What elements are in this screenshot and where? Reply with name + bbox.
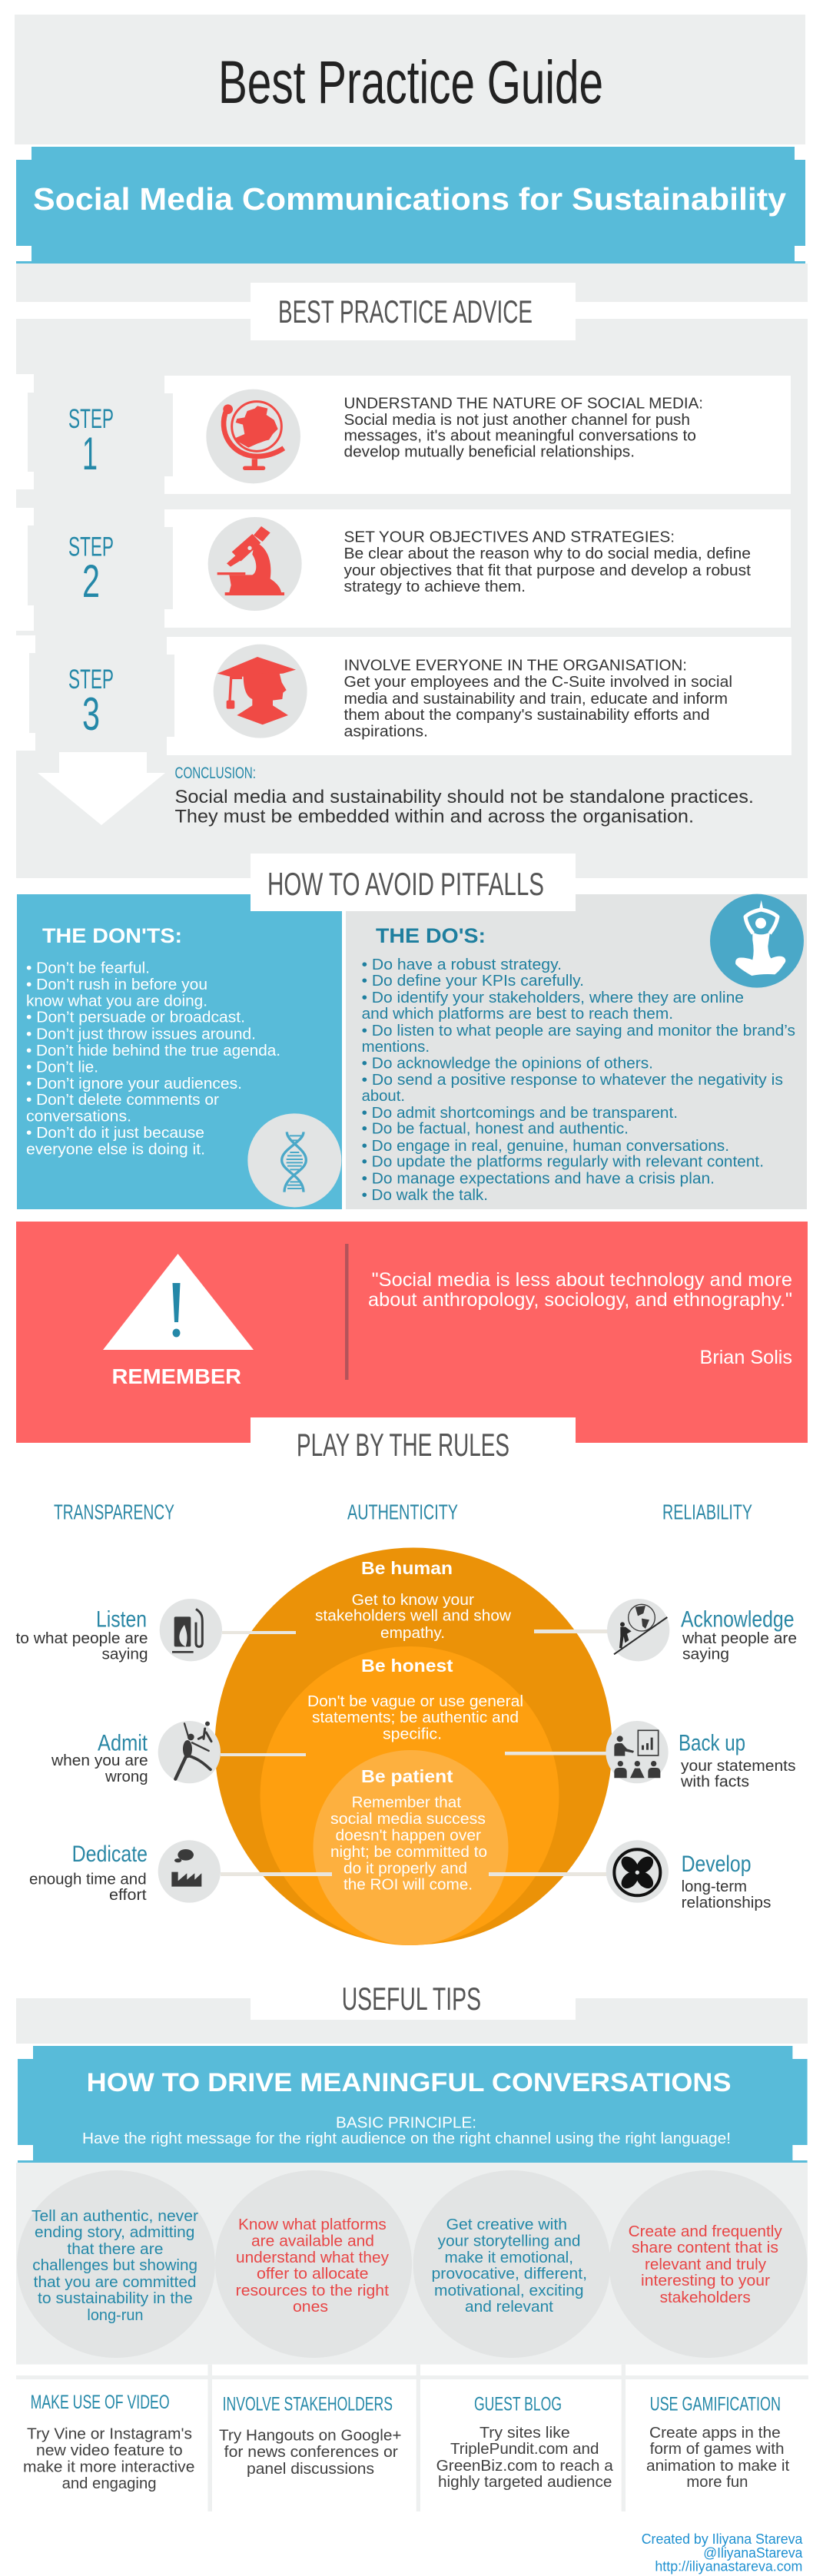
tip column: guest blog: TriplePundit.com and <box>450 2440 599 2458</box>
rule: listen <box>15 1599 222 1663</box>
icon: microscope <box>208 517 302 611</box>
don'ts list: know what you are doing. <box>26 993 207 1010</box>
do's list: • Do update the platforms regularly with relevant content. <box>362 1154 764 1171</box>
be patient <box>330 1766 487 1894</box>
do's list: • Do be factual, honest and authentic. <box>362 1121 629 1138</box>
rule: dedicate: enough time and <box>29 1871 147 1888</box>
tip circle 2 <box>215 2170 412 2358</box>
be honest: Be honest <box>361 1656 453 1676</box>
panel: do's <box>346 894 807 1209</box>
tip column: guest blog: GUEST BLOG <box>474 2394 562 2415</box>
tip circle 1 <box>17 2170 215 2358</box>
icon: dna <box>247 1113 341 1207</box>
step 3 text: aspirations. <box>344 723 428 741</box>
column headings <box>54 1500 752 1524</box>
step 3 text <box>344 656 732 741</box>
quote <box>368 1269 792 1368</box>
step 3 text: INVOLVE EVERYONE IN THE ORGANISATION: <box>344 656 687 675</box>
step 2 text: your objectives that fit that purpose and develop a robust <box>344 562 751 579</box>
tip circle 4: Create and frequently <box>629 2223 783 2240</box>
icon: yoga <box>710 894 804 988</box>
don'ts list: • Don’t persuade or broadcast. <box>26 1010 245 1026</box>
icon: graduate <box>214 645 307 738</box>
do's list: mentions. <box>362 1039 430 1056</box>
title: Best Practice Guide <box>218 48 603 116</box>
rule: back up: Back up <box>679 1731 745 1756</box>
tip circle 1: Tell an authentic, never <box>32 2207 198 2225</box>
rule: listen: saying <box>101 1646 148 1663</box>
rule: back up <box>606 1721 796 1791</box>
tip circle 2: ones <box>293 2298 328 2316</box>
credits <box>642 2531 803 2574</box>
tip circle 4: share content that is <box>632 2239 778 2256</box>
panel: remember <box>16 1222 808 1443</box>
conclusion: Social media and sustainability should not be standalone practices. <box>175 787 754 807</box>
tip circle 4: interesting to your <box>641 2272 770 2289</box>
step 1 <box>16 374 791 494</box>
rule: acknowledge <box>607 1599 797 1663</box>
step 3: 3 <box>82 688 100 740</box>
quote: about anthropology, sociology, and ethnography." <box>368 1289 792 1311</box>
step 3 text: them about the company's sustainability efforts and <box>344 706 710 724</box>
rule: listen: Listen <box>96 1607 147 1632</box>
column headings: TRANSPARENCY <box>54 1500 174 1524</box>
tip circle 2: understand what they <box>236 2249 390 2266</box>
credits: Created by Iliyana Stareva <box>642 2531 803 2547</box>
tip column: video: and engaging <box>62 2475 157 2492</box>
conclusion <box>175 764 754 827</box>
don'ts list: • Don’t lie. <box>26 1059 98 1076</box>
icon: warning triangle <box>103 1254 254 1350</box>
don'ts list: conversations. <box>26 1109 131 1126</box>
be honest: Don't be vague or use general <box>307 1693 523 1710</box>
rule: dedicate: effort <box>109 1887 147 1904</box>
tip column: guest blog: Try sites like <box>480 2424 570 2442</box>
tip circle 1: that you are committed <box>34 2273 197 2291</box>
tip circle 1: to sustainability in the <box>38 2289 193 2307</box>
heading box: how to avoid pitfalls: HOW TO AVOID PITFALLS <box>267 866 544 902</box>
don'ts list: • Don’t be fearful. <box>26 960 150 976</box>
banner: how to drive meaningful conversations: HOW TO DRIVE MEANINGFUL CONVERSATIONS <box>87 2068 731 2097</box>
tip column: guest blog: GreenBiz.com to reach a <box>436 2457 613 2475</box>
step 3 <box>16 635 791 755</box>
tip column: gamification: Create apps in the <box>649 2424 781 2442</box>
do's list: • Do send a positive response to whatever the negativity is <box>362 1072 783 1089</box>
step 3 text: Get your employees and the C-Suite involved in social <box>344 673 732 691</box>
do's list: and which platforms are best to reach them. <box>362 1006 673 1023</box>
do's list: • Do listen to what people are saying and monitor the brand’s <box>362 1023 795 1039</box>
panel: useful tips heading: USEFUL TIPS <box>342 1981 481 2017</box>
tip column: video: make it more interactive <box>23 2458 194 2476</box>
tip column: video: new video feature to <box>36 2442 183 2459</box>
step 1: 1 <box>82 428 98 479</box>
icon: fuel pump <box>160 1599 222 1661</box>
step 2: 2 <box>82 555 100 607</box>
do's list: • Do admit shortcomings and be transparent. <box>362 1105 678 1122</box>
rule: develop <box>606 1840 771 1911</box>
quote: "Social media is less about technology and more <box>372 1269 792 1291</box>
step 2 text: SET YOUR OBJECTIVES AND STRATEGIES: <box>344 529 675 546</box>
don'ts list <box>26 960 280 1159</box>
tip circle 1: ending story, admitting <box>35 2223 194 2241</box>
credits: http://iliyanastareva.com <box>655 2559 802 2574</box>
tip circle 3: motivational, exciting <box>434 2282 584 2299</box>
do's list: • Do acknowledge the opinions of others. <box>362 1056 653 1073</box>
do's list: • Do engage in real, genuine, human conversations. <box>362 1138 729 1155</box>
be patient: Remember that <box>352 1795 461 1812</box>
step 2 text: strategy to achieve them. <box>344 578 526 595</box>
icon: factory <box>158 1840 221 1903</box>
quote: Brian Solis <box>699 1347 792 1368</box>
step 2 <box>16 508 791 631</box>
tip column: stakeholders: for news conferences or <box>224 2443 398 2461</box>
heading box: how to avoid pitfalls <box>251 854 576 911</box>
tip column: gamification: animation to make it <box>646 2457 790 2475</box>
step 2 text <box>344 529 751 595</box>
be honest: statements; be authentic and <box>312 1709 519 1726</box>
do's list: • Do have a robust strategy. <box>362 956 562 973</box>
tip column: video <box>23 2392 194 2492</box>
be patient: the ROI will come. <box>343 1877 473 1894</box>
be patient: Be patient <box>361 1766 453 1786</box>
don'ts list: everyone else is doing it. <box>26 1142 205 1159</box>
do's list: • Do identify your stakeholders, where they are online <box>362 990 744 1006</box>
tip circle 3 <box>413 2170 610 2358</box>
step 1 text: messages, it's about meaningful conversations to <box>344 427 696 444</box>
step 2: STEP <box>68 532 114 562</box>
heading: best practice advice: BEST PRACTICE ADVICE <box>278 293 533 330</box>
step 1 text <box>344 395 703 461</box>
be honest <box>307 1656 523 1743</box>
banner: subtitle: Social Media Communications for Sustainability <box>33 181 786 217</box>
rule: develop: Develop <box>682 1852 752 1877</box>
banner: how to drive meaningful conversations: Have the right message for the right audience on the right channel using the right language! <box>82 2130 731 2147</box>
don'ts list: • Don’t hide behind the true agenda. <box>26 1043 280 1059</box>
step 2 text: Be clear about the reason why to do social media, define <box>344 545 751 562</box>
tip column: gamification: form of games with <box>650 2440 784 2458</box>
tip circle 3: provocative, different, <box>432 2265 587 2283</box>
rule: listen: to what people are <box>15 1630 148 1647</box>
panel: best practice advice <box>16 264 808 878</box>
heading: the do's: THE DO'S: <box>376 924 486 947</box>
rule: admit: when you are <box>51 1752 148 1769</box>
rule: admit <box>51 1721 221 1785</box>
be human: empathy. <box>380 1625 445 1642</box>
rule: acknowledge: what people are <box>682 1630 797 1647</box>
tip circle 2: offer to allocate <box>257 2265 369 2283</box>
icon: dancer <box>158 1721 221 1783</box>
be honest: specific. <box>383 1726 442 1743</box>
rule: dedicate <box>29 1840 221 1904</box>
tip circle 4: stakeholders <box>660 2289 751 2306</box>
conclusion: They must be embedded within and across the organisation. <box>175 807 694 827</box>
be patient: doesn't happen over <box>335 1828 481 1845</box>
be human: Get to know your <box>352 1592 474 1609</box>
be human <box>315 1558 512 1642</box>
be human: stakeholders well and show <box>315 1608 512 1625</box>
panel: don'ts <box>17 894 342 1209</box>
rule: dedicate: Dedicate <box>72 1842 148 1867</box>
credits: @IliyanaStareva <box>703 2545 803 2561</box>
tip column: stakeholders: INVOLVE STAKEHOLDERS <box>223 2394 393 2415</box>
tip circle 4 <box>609 2170 807 2358</box>
tip circle 2: resources to the right <box>236 2282 389 2299</box>
tip circle 1: challenges but showing <box>32 2256 197 2274</box>
heading box: play by the rules: PLAY BY THE RULES <box>297 1427 509 1463</box>
tip column: gamification <box>646 2394 790 2491</box>
don'ts list: • Don’t rush in before you <box>26 976 207 993</box>
tip column: guest blog: highly targeted audience <box>438 2473 612 2491</box>
concentric circles diagram <box>215 1547 612 1945</box>
rule: back up: your statements <box>681 1758 796 1775</box>
panel: tips circles <box>16 2163 808 2365</box>
don'ts list: • Don’t do it just because <box>26 1125 204 1142</box>
step 1 text: Social media is not just another channel for push <box>344 411 690 429</box>
icon: presentation <box>606 1721 669 1783</box>
tip column: stakeholders <box>219 2394 401 2478</box>
rule: develop: relationships <box>682 1895 771 1911</box>
column headings: RELIABILITY <box>662 1500 752 1524</box>
step 1 text: UNDERSTAND THE NATURE OF SOCIAL MEDIA: <box>344 395 703 412</box>
step 3 text: media and sustainability and train, educate and inform <box>344 690 728 708</box>
don'ts list: • Don’t delete comments or <box>26 1092 219 1109</box>
tip circle 1: that there are <box>67 2240 163 2258</box>
step 1: STEP <box>68 404 114 434</box>
do's list: • Do walk the talk. <box>362 1187 488 1204</box>
tip circle 3: Get creative with <box>446 2216 567 2233</box>
step 1 text: develop mutually beneficial relationships. <box>344 443 635 461</box>
banner: how to drive meaningful conversations: BASIC PRINCIPLE: <box>336 2115 476 2132</box>
do's list: • Do define your KPIs carefully. <box>362 973 584 990</box>
label: remember: REMEMBER <box>112 1364 241 1388</box>
tip circle 2: are available and <box>251 2233 374 2249</box>
be patient: social media success <box>330 1811 486 1828</box>
tip circle 2: Know what platforms <box>238 2216 387 2233</box>
do's list: about. <box>362 1088 405 1105</box>
step 3: STEP <box>68 665 114 695</box>
conclusion: CONCLUSION: <box>175 764 256 782</box>
icon: globe <box>206 390 300 483</box>
tip column: video: Try Vine or Instagram's <box>27 2425 192 2443</box>
banner: how to drive meaningful conversations <box>18 2046 808 2163</box>
heading: the don'ts: THE DON'TS: <box>42 924 182 947</box>
banner: subtitle <box>16 147 805 264</box>
be patient: night; be committed to <box>330 1844 487 1861</box>
tip circle 3: make it emotional, <box>444 2249 573 2266</box>
panel: useful tips heading <box>16 1981 808 2044</box>
do's list: • Do manage expectations and have a crisis plan. <box>362 1171 715 1188</box>
tip circle 1: long-run <box>87 2306 143 2324</box>
rule: admit: Admit <box>98 1731 148 1756</box>
heading box: play by the rules <box>251 1417 576 1464</box>
column headings: AUTHENTICITY <box>347 1500 458 1524</box>
icon: fan <box>606 1840 669 1903</box>
title panel <box>15 15 805 144</box>
rule: acknowledge: Acknowledge <box>681 1607 795 1632</box>
rule: admit: wrong <box>105 1769 148 1785</box>
rule: back up: with facts <box>680 1774 749 1791</box>
do's list <box>362 956 795 1204</box>
don'ts list: • Don’t just throw issues around. <box>26 1026 256 1043</box>
rule: develop: long-term <box>682 1878 747 1895</box>
tip column: video: MAKE USE OF VIDEO <box>31 2392 170 2413</box>
don'ts list: • Don’t ignore your audiences. <box>26 1076 242 1092</box>
icon: pushing globe <box>607 1599 669 1661</box>
tip column: stakeholders: Try Hangouts on Google+ <box>219 2427 401 2445</box>
be patient: do it properly and <box>343 1861 467 1878</box>
arrow: down to conclusion <box>38 752 165 825</box>
tip circle 4: relevant and truly <box>645 2256 767 2273</box>
tip circle 3: your storytelling and <box>438 2233 581 2249</box>
tip column: guest blog <box>436 2394 613 2491</box>
rule: acknowledge: saying <box>682 1646 729 1663</box>
tip column: gamification: more fun <box>686 2473 748 2491</box>
tip circle 3: and relevant <box>465 2298 553 2316</box>
tip column: stakeholders: panel discussions <box>247 2460 374 2478</box>
be human: Be human <box>361 1558 453 1578</box>
